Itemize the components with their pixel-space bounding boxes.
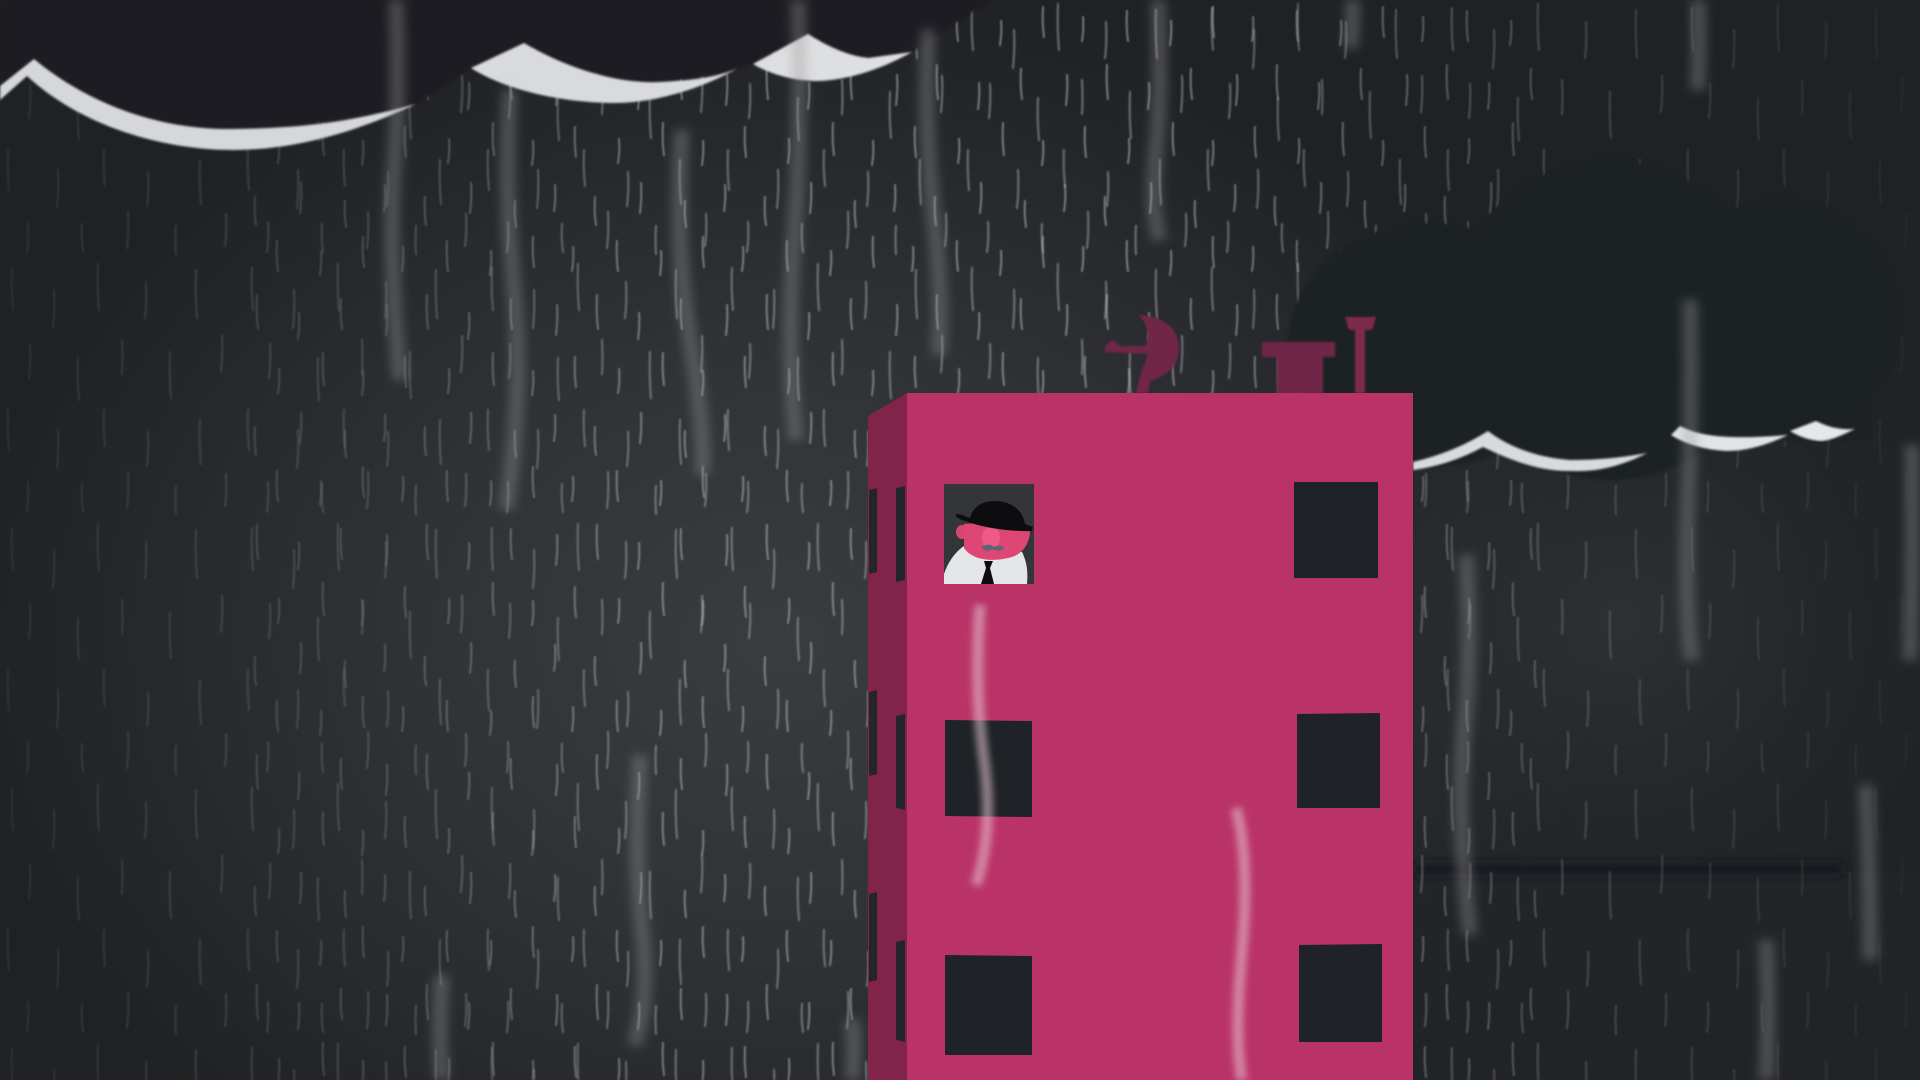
building side wall (868, 393, 907, 1080)
man: nose (982, 527, 1000, 549)
man: tie (981, 561, 994, 584)
cloud highlight: crescent 2 (471, 43, 738, 103)
dark cloud: top left (0, 0, 990, 129)
cloud highlight: crescent 3 (753, 34, 912, 81)
rooftop: dark umbrella silhouette (1105, 315, 1179, 393)
man: shirt (944, 546, 1027, 584)
cloud highlight: crescent 6 (1790, 421, 1855, 441)
foreground rain streaks (392, 0, 1913, 1080)
building (868, 393, 1413, 1080)
man: bowler hat (956, 501, 1033, 531)
cloud highlight: crescent 1 (0, 59, 416, 150)
man: ear (956, 525, 968, 539)
front windows (945, 482, 1382, 1055)
cloud highlight: crescent 5 (1671, 426, 1788, 451)
building front wall (907, 393, 1413, 1080)
rooftop: chimney (1262, 342, 1335, 394)
man: moustache (981, 545, 1004, 551)
window with man in bowler hat (944, 484, 1034, 584)
man: face (964, 523, 1030, 560)
rooftop: pipe (1345, 317, 1376, 393)
ground and horizon on the right (1413, 864, 1920, 1080)
cloud highlight: crescent 4 (1413, 431, 1647, 471)
side wall windows (869, 486, 905, 1042)
dark cloud: right behind building (1288, 160, 1900, 480)
